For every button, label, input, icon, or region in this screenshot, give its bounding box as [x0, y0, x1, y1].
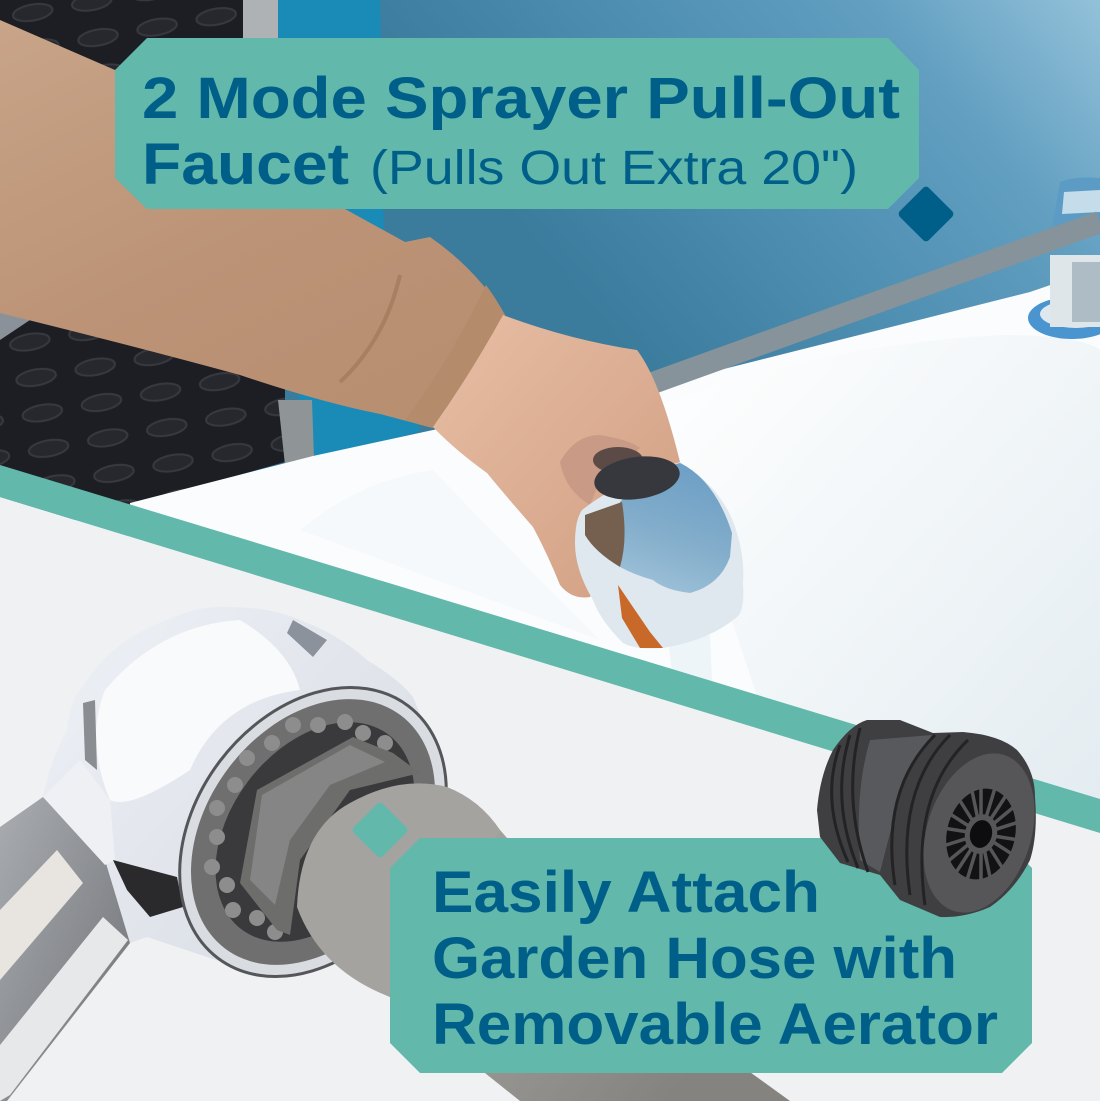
upper heading text: Faucet [142, 132, 349, 197]
faucet base on tub rim [1028, 178, 1100, 339]
teal wall strip [278, 0, 420, 458]
diamond marker lower [351, 801, 409, 859]
hand gripping sprayer [433, 315, 680, 598]
sleeve of sweater [0, 20, 505, 428]
lower heading text: Easily Attach [432, 860, 820, 925]
black floor mat [0, 0, 314, 506]
water stream [668, 635, 712, 682]
aerator ring, nozzles and hex nut [124, 635, 502, 1029]
gray hose close-up [300, 778, 790, 1101]
sleeve fold crease [340, 275, 400, 382]
callout panel upper [115, 38, 919, 209]
chrome spray head [575, 447, 743, 648]
upper heading text: (Pulls Out Extra 20") [370, 142, 858, 195]
bathtub [130, 268, 1100, 840]
lower heading text: Removable Aerator [432, 992, 998, 1057]
fingers shaded inside grip [560, 435, 640, 505]
callout panel lower [390, 838, 1032, 1073]
photo: blue wall background [0, 0, 1100, 520]
icon: removable aerator part [817, 720, 1054, 927]
upper heading text: 2 Mode Sprayer Pull-Out [142, 66, 900, 131]
diamond marker upper [897, 185, 955, 243]
teal diagonal band [0, 465, 1100, 833]
knitted cuff [405, 285, 505, 428]
chrome faucet elbow [0, 607, 447, 1101]
lower heading text [432, 860, 998, 1057]
lower light background [0, 497, 1100, 1101]
upper heading text [142, 66, 900, 197]
gray hose collar [297, 783, 500, 997]
lower heading text: Garden Hose with [432, 926, 957, 991]
braided sprayer hose [650, 222, 1100, 384]
